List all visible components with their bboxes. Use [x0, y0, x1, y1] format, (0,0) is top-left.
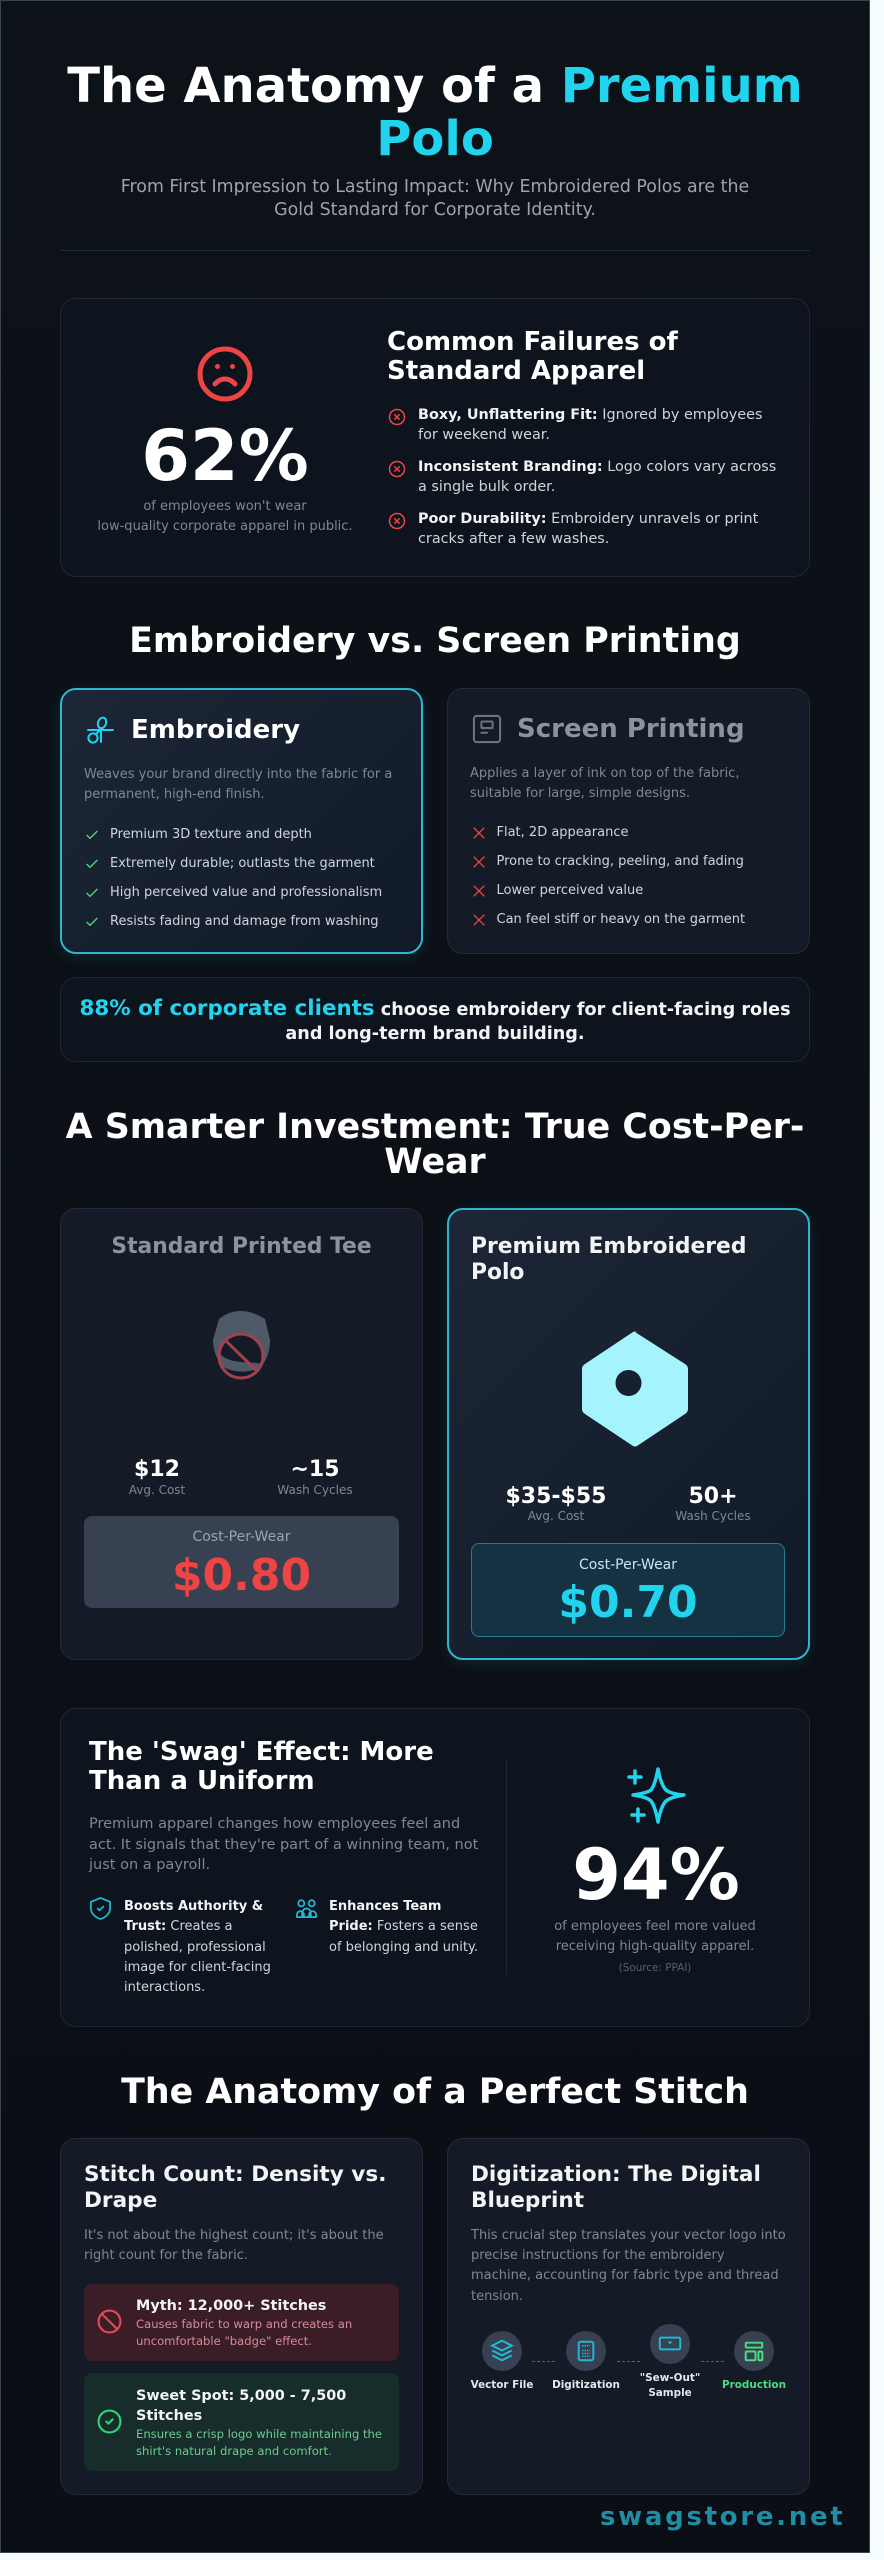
myth text: uncomfortable "badge" effect.: [136, 2334, 312, 2348]
heading: common failures: Standard Apparel: [387, 356, 645, 386]
heading: common failures: [387, 327, 678, 386]
label: sew-out sample: [630, 2371, 710, 2401]
embroidery benefits list: [86, 827, 382, 929]
label: vector file: Vector File: [471, 2379, 533, 2391]
stat caption: [554, 1919, 756, 1954]
icon: cross 4: [473, 914, 485, 926]
stat caption: receiving high-quality apparel.: [556, 1939, 754, 1954]
heading: smarter investment: A Smarter Investment: True Cost-Per-: [66, 1107, 804, 1147]
icon: sparkles: [627, 1767, 686, 1824]
swag description: act. It signals that they're part of a winning team, not: [89, 1837, 478, 1853]
sweet spot text: [136, 2386, 382, 2461]
stat: tee average cost: $12: [134, 1457, 180, 1482]
embroidery description: permanent, high-end finish.: [84, 787, 265, 802]
icon: sad face: [198, 346, 252, 402]
icon: tee with ban symbol: [213, 1311, 270, 1380]
panel: stitch count: [60, 2138, 423, 2495]
icon: hexagon polo: [582, 1332, 688, 1446]
heading: premium embroidered polo: [471, 1234, 746, 1285]
benefit: team pride: Enhances Team: [329, 1899, 441, 1914]
callout text: [79, 996, 791, 1044]
process flow: [471, 2324, 785, 2404]
screen printing description: Applies a layer of ink on top of the fabric,: [470, 766, 739, 781]
digitization description: tension.: [471, 2289, 523, 2304]
icon: x circle 3: [388, 512, 406, 530]
title: [67, 58, 803, 166]
icon: shield check: [90, 1897, 111, 1920]
myth text: [136, 2296, 352, 2351]
stat caption: [97, 499, 353, 534]
drawback 4: Can feel stiff or heavy on the garment: [496, 912, 745, 927]
heading: premium embroidered polo: Premium Embroidered: [471, 1234, 746, 1259]
heading: digitization: [471, 2162, 761, 2214]
screen printing description: [470, 766, 739, 801]
screen printing drawbacks list: [473, 825, 745, 927]
swag description: just on a payroll.: [89, 1857, 210, 1873]
failure 2: Inconsistent Branding: Logo colors vary across: [418, 459, 776, 475]
icon: check 2: [86, 860, 98, 868]
stitch description: [84, 2226, 384, 2266]
heading: anatomy of a perfect stitch: The Anatomy of a Perfect Stitch: [121, 2072, 749, 2112]
icon: check circle: [97, 2409, 122, 2434]
callout text: and long-term brand building.: [285, 1024, 585, 1044]
stat: 62%: 62%: [141, 415, 309, 497]
label: cost-per-wear: Cost-Per-Wear: [579, 1557, 677, 1573]
failure 3: cracks after a few washes.: [418, 531, 609, 547]
benefit: authority: Trust: Creates a: [124, 1919, 232, 1934]
benefit 1: Premium 3D texture and depth: [110, 827, 312, 842]
stat: polo average cost: $35-$55: [506, 1484, 606, 1509]
benefit: team pride: of belonging and unity.: [329, 1940, 478, 1955]
stat caption: of employees won't wear: [143, 499, 307, 514]
panel: embroidery: [60, 688, 423, 954]
benefit 4: Resists fading and damage from washing: [110, 914, 379, 929]
heading: screen printing: Screen Printing: [517, 714, 745, 744]
value: $0.70: $0.70: [558, 1577, 698, 1628]
icon: sample: [650, 2324, 690, 2364]
sweet spot text: shirt's natural drape and comfort.: [136, 2444, 332, 2458]
failure list: [388, 407, 776, 547]
subtitle: From First Impression to Lasting Impact: Why Embroidered Polos are the: [121, 177, 749, 197]
heading: common failures: Common Failures of: [387, 327, 678, 357]
heading: stitch count: Drape: [84, 2188, 157, 2213]
subtitle: [121, 177, 749, 220]
icon: team: [296, 1899, 317, 1918]
label: tee average cost: Avg. Cost: [129, 1483, 185, 1497]
heading: stitch count: Stitch Count: Density vs.: [84, 2162, 386, 2187]
tee cost-per-wear box: [84, 1516, 399, 1608]
icon: screen print frame: [472, 714, 502, 744]
benefit: authority: [124, 1899, 271, 1995]
failure 1: Boxy, Unflattering Fit: Ignored by employees: [418, 407, 762, 423]
benefit: authority: Boosts Authority &: [124, 1899, 263, 1914]
heading: premium embroidered polo: Polo: [471, 1260, 524, 1285]
heading: stitch count: [84, 2162, 386, 2213]
heading: smarter investment: Wear: [384, 1142, 486, 1182]
swag description: [88, 1816, 478, 1873]
callout: 88% of clients: [60, 977, 810, 1062]
polo cost-per-wear box: [471, 1543, 785, 1637]
heading: digitization: Digitization: The Digital: [471, 2162, 761, 2187]
panel: common failures: [60, 298, 810, 577]
heading: smarter investment: [66, 1107, 804, 1182]
heading: swag effect: [89, 1737, 434, 1796]
icon: check 3: [86, 888, 98, 898]
panel: screen printing: [447, 688, 810, 954]
sweet spot text: Sweet Spot: 5,000 - 7,500: [136, 2388, 346, 2404]
icon: layout: [734, 2331, 774, 2371]
stat caption: low-quality corporate apparel in public.: [97, 519, 353, 534]
icon: cross 2: [473, 856, 485, 868]
panel: swag effect: [60, 1708, 810, 2027]
footer brand: swagstore.net: [600, 2502, 845, 2532]
label: cost-per-wear: Cost-Per-Wear: [192, 1529, 291, 1545]
subtitle: Gold Standard for Corporate Identity.: [274, 200, 596, 220]
benefit: authority: image for client-facing: [124, 1960, 271, 1975]
drawback 2: Prone to cracking, peeling, and fading: [496, 854, 744, 869]
failure 3: [418, 511, 758, 547]
icon: calculator: [566, 2331, 606, 2371]
icon: check 4: [86, 918, 98, 926]
benefit 3: High perceived value and professionalism: [110, 885, 382, 900]
failure 3: Poor Durability: Embroidery unravels or print: [418, 511, 758, 527]
label: digitization: Digitization: [552, 2379, 620, 2391]
stat: 94%: 94%: [572, 1834, 740, 1916]
digitization description: [471, 2226, 786, 2307]
heading: swag effect: Than a Uniform: [89, 1766, 315, 1796]
label: polo wash cycles: Wash Cycles: [675, 1509, 751, 1523]
icon: needle and thread: [87, 716, 114, 744]
heading: standard printed tee: Standard Printed Tee: [111, 1234, 372, 1259]
swag description: Premium apparel changes how employees feel and: [89, 1816, 460, 1832]
label: sew-out sample: Sample: [648, 2387, 692, 2399]
icon: layers: [482, 2331, 522, 2371]
icon: x circle 2: [388, 460, 406, 478]
embroidery description: Weaves your brand directly into the fabric for a: [84, 767, 392, 782]
myth box: [84, 2284, 399, 2361]
label: polo average cost: Avg. Cost: [528, 1509, 584, 1523]
failure 2: [418, 459, 776, 495]
icon: x circle 1: [388, 408, 406, 426]
heading: embroidery vs screen printing: Embroidery vs. Screen Printing: [129, 621, 741, 661]
failure 1: [418, 407, 762, 443]
drawback 3: Lower perceived value: [496, 883, 643, 898]
label: production: Production: [722, 2379, 786, 2391]
heading: digitization: Blueprint: [471, 2188, 584, 2213]
stat: polo wash cycles: 50+: [688, 1484, 738, 1509]
digitization description: machine, accounting for fabric type and thread: [471, 2268, 779, 2283]
failure 2: a single bulk order.: [418, 479, 555, 495]
label: sew-out sample: "Sew-Out": [640, 2372, 700, 2384]
stitch description: right count for the fabric.: [84, 2248, 248, 2263]
callout text: 88% of corporate clients choose embroidery for client-facing roles: [79, 996, 791, 1021]
source note: (Source: PPAI): [619, 1962, 691, 1974]
failure 1: for weekend wear.: [418, 427, 550, 443]
icon: cross 3: [473, 885, 485, 897]
sweet spot text: Stitches: [136, 2408, 202, 2424]
digitization description: precise instructions for the embroidery: [471, 2248, 725, 2263]
stat: tee wash cycles: ~15: [290, 1457, 340, 1482]
benefit: authority: polished, professional: [124, 1940, 266, 1955]
icon: ban: [97, 2309, 122, 2334]
label: tee wash cycles: Wash Cycles: [277, 1483, 353, 1497]
myth text: Myth: 12,000+ Stitches: [136, 2298, 326, 2314]
panel: digitization: [447, 2138, 810, 2495]
sweet spot text: Ensures a crisp logo while maintaining the: [136, 2427, 382, 2441]
value: $0.80: $0.80: [172, 1550, 311, 1601]
icon: cross 1: [473, 827, 485, 839]
panel: premium embroidered polo: [447, 1208, 810, 1660]
panel: standard printed tee: [60, 1208, 423, 1660]
heading: swag effect: The 'Swag' Effect: More: [89, 1737, 434, 1767]
screen printing description: suitable for large, simple designs.: [470, 786, 690, 801]
benefit: authority: interactions.: [124, 1980, 205, 1995]
benefit: team pride: [329, 1899, 478, 1955]
digitization description: This crucial step translates your vector logo into: [471, 2228, 786, 2243]
icon: check 1: [86, 830, 98, 840]
stat caption: of employees feel more valued: [554, 1919, 756, 1934]
benefit: team pride: Pride: Fosters a sense: [329, 1919, 478, 1934]
benefit 2: Extremely durable; outlasts the garment: [110, 856, 375, 871]
myth text: Causes fabric to warp and creates an: [136, 2317, 352, 2331]
title: The Anatomy of a Premium: [67, 58, 803, 114]
sweet spot box: [84, 2373, 399, 2471]
embroidery description: [84, 767, 392, 802]
heading: embroidery: Embroidery: [131, 715, 300, 745]
drawback 1: Flat, 2D appearance: [496, 825, 628, 840]
title: Polo: [376, 110, 494, 166]
stitch description: It's not about the highest count; it's about the: [84, 2228, 384, 2243]
